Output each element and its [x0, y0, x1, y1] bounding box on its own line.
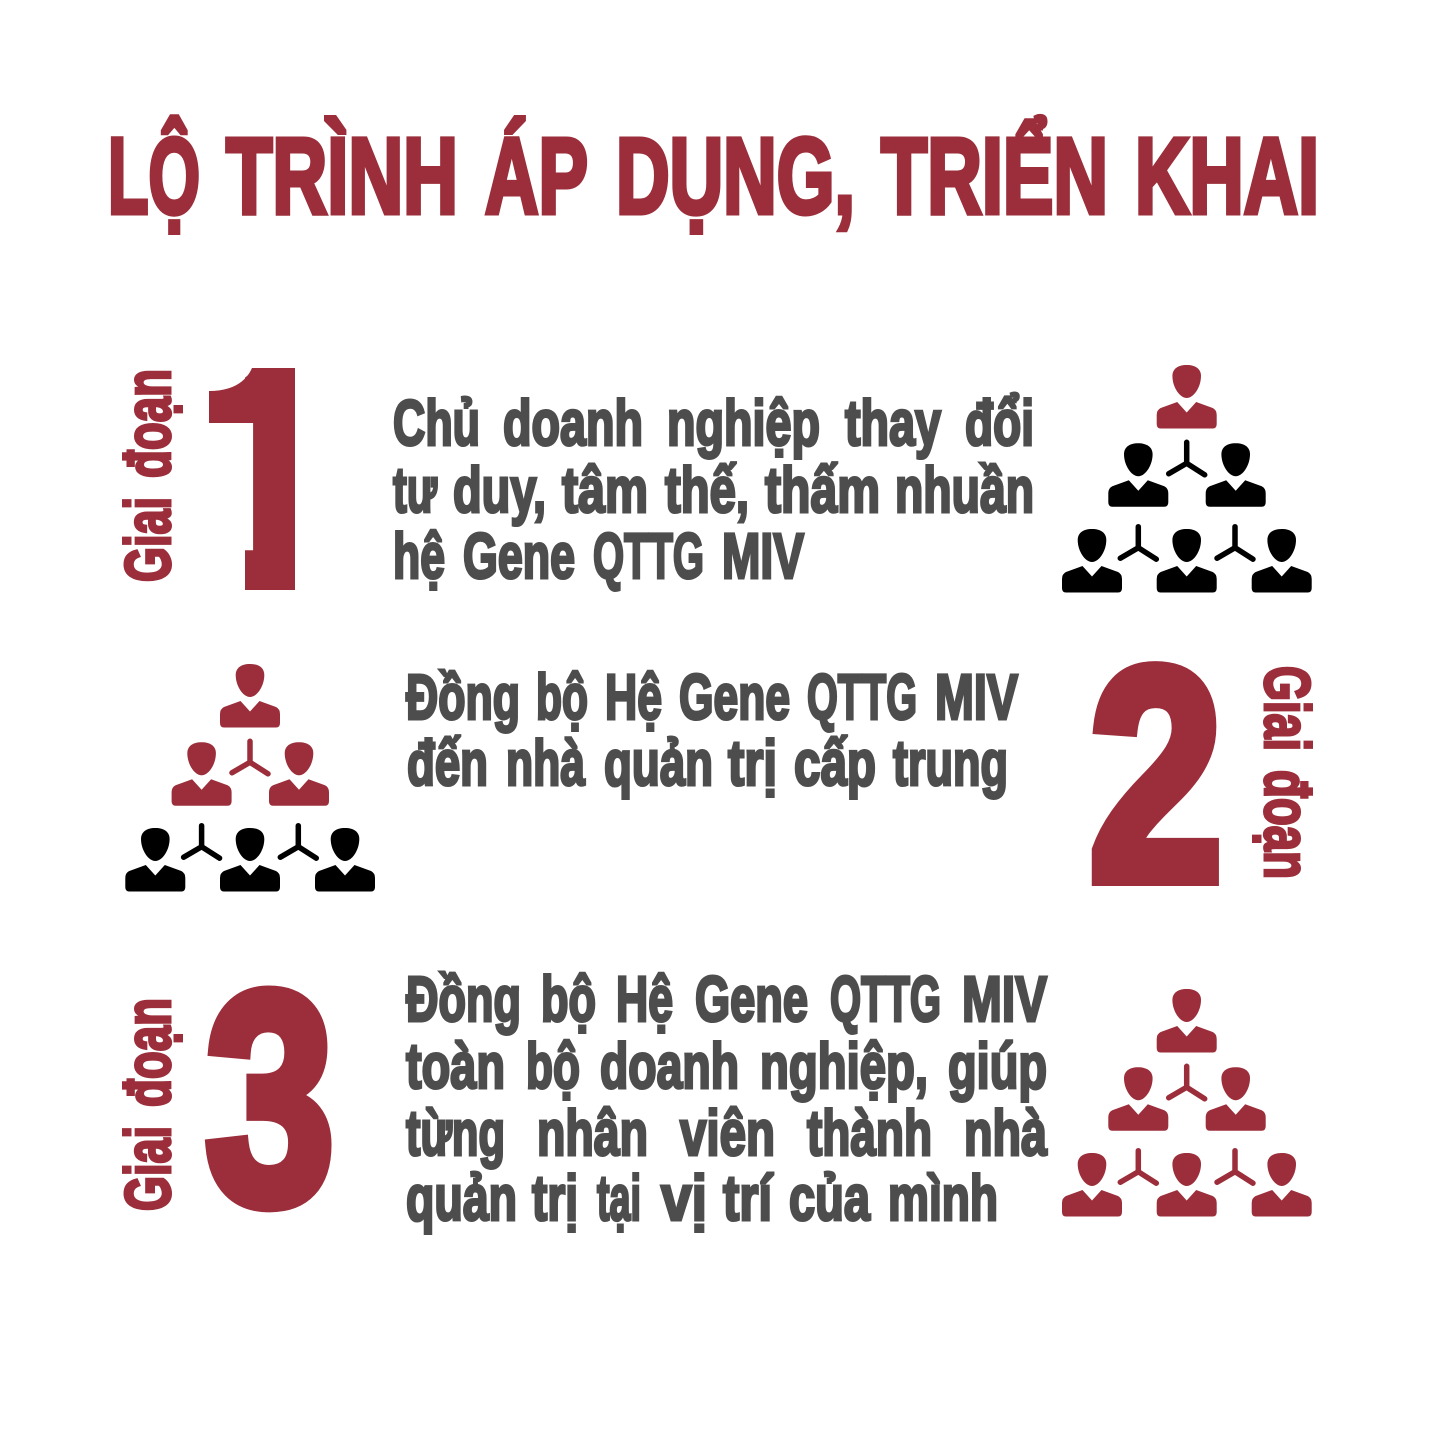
stage 3 description: nghiệp,: [760, 1030, 928, 1102]
stage 1 label: đoạn: [112, 369, 184, 478]
stage 3 description: Gene: [695, 963, 808, 1035]
stage 1 description: Gene: [463, 520, 575, 592]
stage 3 description: viên: [680, 1097, 775, 1169]
stage 2 description: [406, 661, 1018, 799]
stage 2 number: 2: [1089, 606, 1223, 943]
stage 3 description: thành: [807, 1097, 932, 1169]
icon: org pyramid, two rows red: [125, 664, 375, 892]
stage 1 description: hệ: [393, 520, 445, 592]
stage 1 description: đổi: [965, 387, 1034, 459]
title: KHAI: [1135, 115, 1319, 236]
stage 2 label: Giai: [1251, 666, 1323, 751]
stage 3 description: QTTG: [830, 963, 941, 1035]
stage 3 description: trị: [532, 1162, 578, 1234]
stage 2 description: bộ: [536, 661, 588, 733]
stage 3 description: MIV: [962, 963, 1047, 1035]
stage 1 description: tư: [393, 454, 437, 526]
stage 3 description: từng: [406, 1097, 505, 1169]
stage 3 description: nhà: [964, 1097, 1047, 1169]
icon: org pyramid, top red: [1062, 365, 1312, 592]
stage 3 description: bộ: [526, 1030, 580, 1102]
stage 2 description: đến: [407, 727, 488, 799]
stage 3 description: toàn: [406, 1030, 505, 1102]
stage 3 description: doanh: [600, 1030, 739, 1102]
stage 2 description: Gene: [679, 661, 790, 733]
icon: org pyramid, all red: [1062, 989, 1312, 1216]
title: TRIỂN: [881, 115, 1108, 236]
stage 3 description: vị: [661, 1162, 707, 1234]
stage 2 description: quản: [604, 727, 713, 799]
stage 3 description: giúp: [948, 1030, 1047, 1102]
stage 1 description: nghiệp: [667, 387, 820, 459]
stage 1 description: thế,: [665, 454, 749, 526]
stage 3 description: Đồng: [406, 963, 521, 1035]
stage 1 description: QTTG: [593, 520, 704, 592]
title: [108, 115, 1319, 236]
stage 1 description: nhuần: [895, 454, 1034, 526]
stage 3 label: Giai: [112, 1126, 184, 1211]
stage 1 description: [393, 387, 1034, 592]
stage 1 number: 1: [196, 304, 340, 652]
stage 1 description: MIV: [722, 520, 804, 592]
panel: stage 2: [125, 606, 1323, 943]
stage 1 description: Chủ: [393, 387, 480, 459]
stage 1 description: tâm: [562, 454, 648, 526]
stage 1 description: thay: [845, 387, 941, 459]
title: LỘ: [108, 115, 200, 236]
stage 2 label: đoạn: [1251, 770, 1323, 879]
stage 1 label: Giai: [112, 497, 184, 582]
title: TRÌNH: [226, 115, 458, 236]
stage 1 number: [209, 368, 295, 590]
stage 3 description: của: [789, 1162, 870, 1234]
stage 2 description: cấp: [794, 727, 876, 799]
stage 3 description: bộ: [541, 963, 596, 1035]
stage 2 description: QTTG: [807, 661, 917, 733]
panel: stage 3: [112, 930, 1312, 1266]
stage 2 description: trị: [728, 727, 777, 799]
stage 2 description: Đồng: [406, 661, 520, 733]
stage 3 description: [406, 963, 1047, 1234]
stage 1 description: doanh: [503, 387, 643, 459]
stage 1 description: duy,: [453, 454, 546, 526]
stage 2 label: [1251, 666, 1323, 879]
stage 3 description: mình: [888, 1162, 998, 1234]
panel: stage 1: [112, 304, 1312, 652]
stage 3 description: Hệ: [616, 963, 673, 1035]
stage 2 description: Hệ: [605, 661, 662, 733]
stage 3 label: [112, 998, 184, 1211]
stage 3 number: 3: [206, 930, 334, 1266]
stage 3 description: quản: [406, 1162, 517, 1234]
stage 2 description: trung: [893, 727, 1008, 799]
title: DỤNG,: [616, 115, 855, 236]
stage 1 label: [112, 369, 184, 582]
stage 1 description: thấm: [765, 454, 880, 526]
stage 3 description: tại: [597, 1162, 641, 1234]
stage 2 description: MIV: [935, 661, 1018, 733]
title: ÁP: [485, 115, 588, 236]
stage 3 description: trí: [723, 1162, 774, 1234]
stage 3 description: nhân: [537, 1097, 648, 1169]
stage 2 description: nhà: [506, 727, 585, 799]
stage 3 label: đoạn: [112, 998, 184, 1107]
